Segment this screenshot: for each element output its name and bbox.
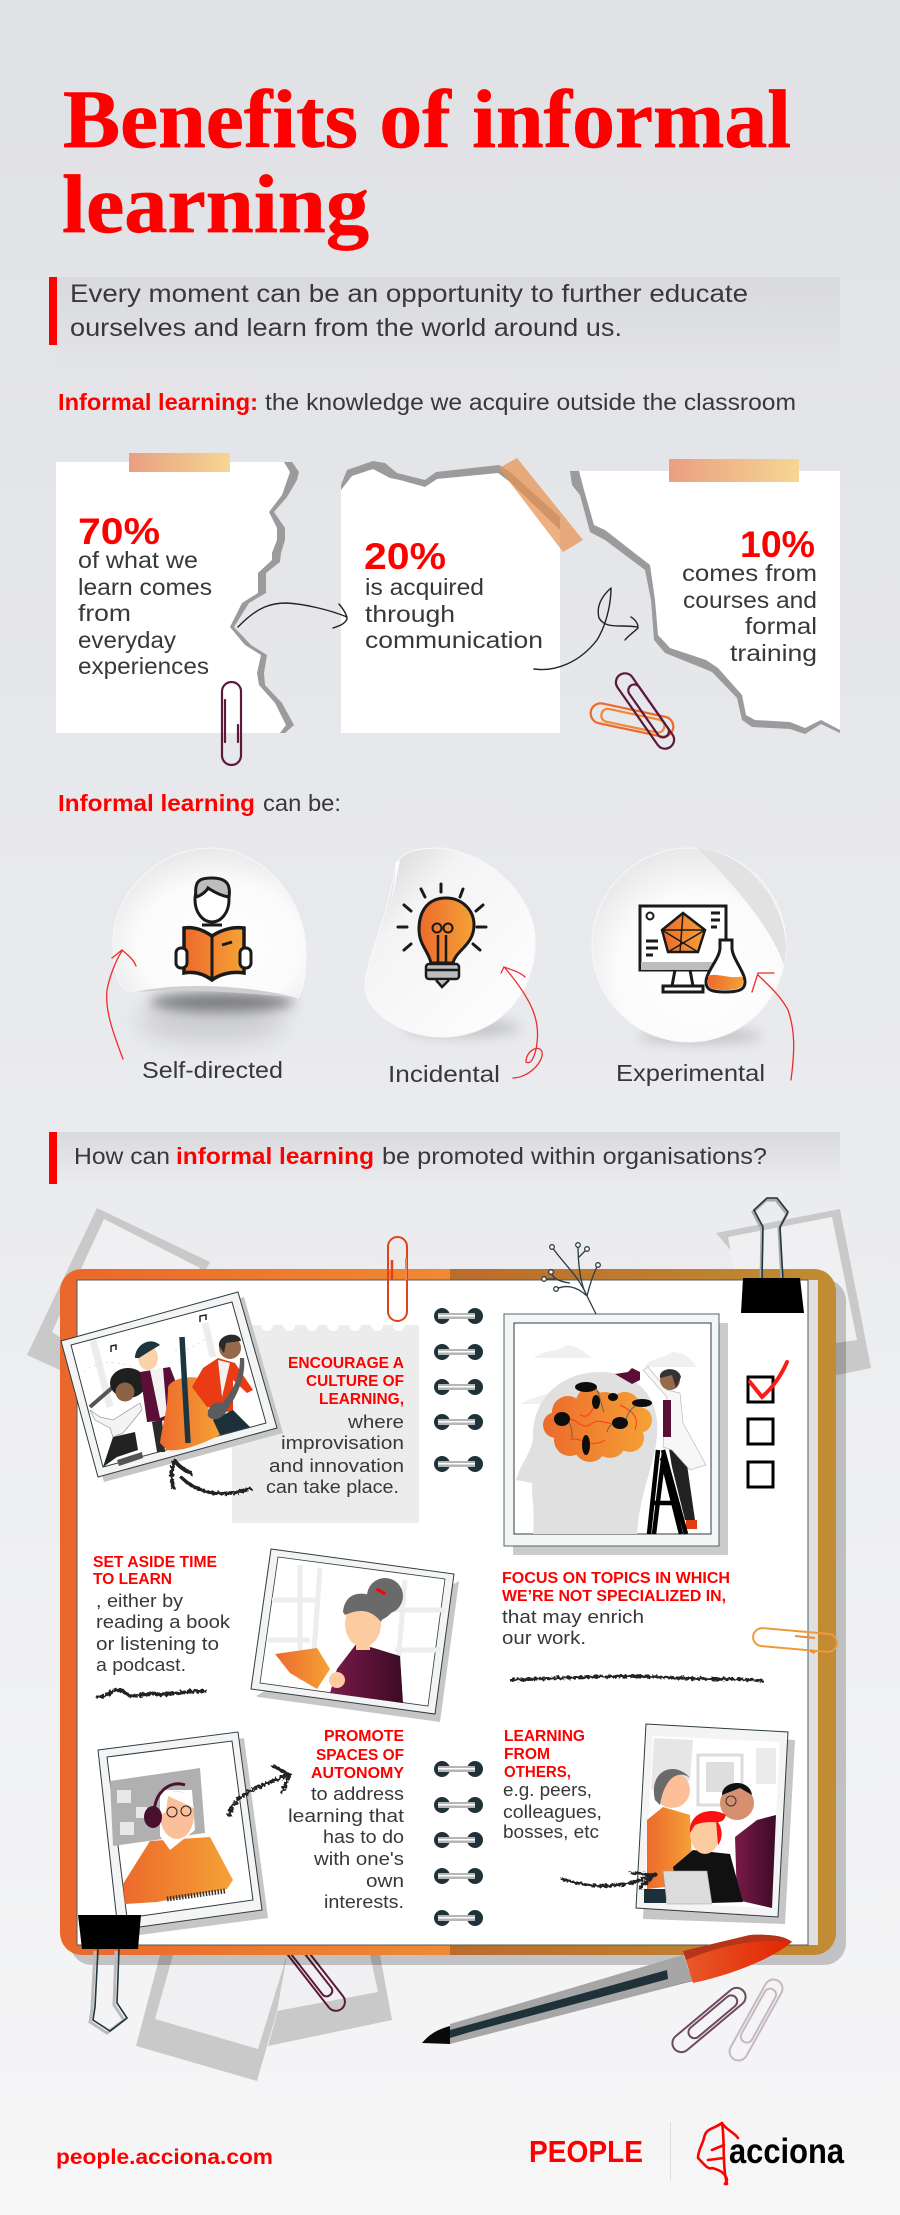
icon: grey note with punched holes: [232, 1319, 419, 1523]
text block: promote spaces of autonomy: to address: [311, 1784, 404, 1804]
sticker labels: Incidental: [388, 1061, 500, 1087]
text block: promote spaces of autonomy: interests.: [324, 1892, 404, 1912]
text block: encourage a culture of learning: LEARNING,: [319, 1391, 404, 1408]
footer url: people.acciona.com: [56, 2146, 273, 2169]
panel: 10 percent torn card: training: [730, 640, 817, 666]
panel: 20 percent torn card: [341, 458, 583, 733]
photo: brain and scientist: [504, 1314, 728, 1555]
text block: encourage a culture of learning: and innovation: [269, 1456, 404, 1476]
arrow: scribble to musicians: [172, 1461, 250, 1494]
title: [62, 73, 791, 250]
panel: 70 percent torn card: 70%: [78, 511, 160, 552]
sticker labels: Self-directed: [142, 1057, 283, 1083]
panel: 20 percent torn card: communication: [365, 627, 543, 653]
panel: 70 percent torn card: everyday: [78, 627, 177, 653]
decorative back photos: [27, 1208, 871, 2081]
text block: promote spaces of autonomy: PROMOTE: [324, 1728, 404, 1745]
photo: three colleagues: [636, 1724, 795, 1924]
icon: light bulb: [398, 884, 486, 987]
text block: learning from others: OTHERS,: [504, 1764, 571, 1781]
icon: spiral rings upper: [434, 1308, 483, 1472]
intro callout: [49, 277, 840, 372]
intro callout: Every moment can be an opportunity to further educate: [70, 280, 748, 308]
icon: spiral rings lower: [434, 1761, 483, 1926]
text block: promote spaces of autonomy: SPACES OF: [316, 1747, 404, 1764]
photo: girl with headphones: [98, 1732, 268, 1937]
definition heading: the knowledge we acquire outside the classroom: [265, 389, 796, 415]
panel: self-directed sticker: [113, 848, 306, 1042]
question callout: [49, 1132, 840, 1184]
text block: focus on topics: FOCUS ON TOPICS IN WHICH: [502, 1570, 730, 1587]
definition heading: Informal learning:: [58, 389, 258, 415]
icon: orange paperclip right: [752, 1627, 838, 1653]
panel: notebook: [60, 1243, 846, 1965]
icon: person reading: [176, 878, 251, 980]
arrow: scribble to autonomy text: [229, 1766, 290, 1815]
text block: focus on topics: WE’RE NOT SPECIALIZED IN,: [502, 1588, 726, 1605]
panel: 70 percent torn card: of what we: [78, 547, 198, 573]
title: Benefits of informal: [63, 73, 791, 165]
panel: incidental sticker: [365, 848, 535, 1037]
arrow: 70 to 20: [238, 603, 347, 628]
text block: learning from others: [503, 1728, 602, 1842]
panel: 10 percent torn card: 10%: [740, 524, 815, 565]
text block: encourage a culture of learning: can take place.: [266, 1477, 399, 1497]
text block: focus on topics: that may enrich: [502, 1607, 644, 1627]
text block: learning from others: bosses, etc: [503, 1822, 599, 1842]
heading: informal learning can be: Informal learning: [58, 790, 255, 816]
text block: promote spaces of autonomy: with one's: [313, 1849, 404, 1869]
text block: set aside time to learn: TO LEARN: [93, 1571, 172, 1588]
panel: 20 percent torn card: is acquired: [365, 574, 484, 600]
text block: encourage a culture of learning: ENCOURAGE A: [288, 1355, 404, 1372]
text block: set aside time to learn: , either by: [96, 1591, 183, 1611]
intro callout: ourselves and learn from the world around us.: [70, 314, 622, 342]
logo: acciona: acciona: [729, 2132, 844, 2171]
panel: 10 percent torn card: formal: [745, 613, 817, 639]
text block: encourage a culture of learning: where: [347, 1412, 404, 1432]
panel: 10 percent torn card: [570, 459, 840, 734]
text block: learning from others: colleagues,: [503, 1802, 602, 1822]
arrow: scribble to colleagues photo: [562, 1873, 654, 1888]
icon: binder clip top right: [741, 1198, 804, 1313]
question callout: How can: [74, 1143, 170, 1169]
text block: encourage a culture of learning: CULTURE OF: [306, 1373, 404, 1390]
icon: branch above photo: [542, 1243, 600, 1314]
question callout: informal learning: [176, 1143, 374, 1169]
text block: promote spaces of autonomy: [288, 1728, 404, 1912]
footer people wordmark: PEOPLE: [529, 2134, 643, 2169]
text block: promote spaces of autonomy: has to do: [323, 1827, 404, 1847]
icon: paperclips near card three: [589, 670, 678, 752]
panel: 10 percent torn card: comes from: [682, 560, 817, 586]
heading: informal learning can be: [58, 790, 341, 816]
icon: paperclip under notebook: [282, 1936, 349, 2014]
panel: 70 percent torn card: experiences: [78, 653, 209, 679]
text block: promote spaces of autonomy: AUTONOMY: [311, 1765, 404, 1782]
text block: set aside time to learn: SET ASIDE TIME: [93, 1554, 217, 1571]
text block: learning from others: e.g. peers,: [503, 1780, 592, 1800]
text block: learning from others: FROM: [504, 1746, 550, 1763]
title: learning: [62, 158, 369, 250]
icon: orange paperclip top: [388, 1237, 407, 1321]
footer divider: [670, 2122, 671, 2180]
logo: acciona: [698, 2123, 844, 2184]
photo: musicians: [61, 1292, 283, 1482]
sticker labels: [142, 1057, 765, 1087]
text block: learning from others: LEARNING: [504, 1728, 585, 1745]
scribble divider: [510, 1676, 763, 1681]
icon: paperclip on card one: [222, 682, 241, 765]
panel: 10 percent torn card: courses and: [683, 587, 817, 613]
text block: set aside time to learn: or listening to: [96, 1634, 219, 1654]
icon: loose paperclips: [669, 1976, 786, 2064]
text block: set aside time to learn: reading a book: [96, 1612, 231, 1632]
text block: encourage a culture of learning: [266, 1355, 404, 1497]
panel: 70 percent torn card: learn comes: [78, 574, 212, 600]
text block: set aside time to learn: a podcast.: [96, 1655, 186, 1675]
text block: promote spaces of autonomy: own: [366, 1871, 404, 1891]
question callout: be promoted within organisations?: [382, 1143, 767, 1169]
checklist: [748, 1362, 787, 1487]
panel: 70 percent torn card: from: [78, 600, 131, 626]
definition heading: [58, 389, 796, 415]
sticker labels: Experimental: [616, 1060, 765, 1086]
arrow: 20 to 10: [534, 588, 638, 670]
photo: woman reading: [251, 1549, 459, 1722]
text block: encourage a culture of learning: improvisation: [281, 1433, 404, 1453]
panel: 70 percent torn card: [56, 453, 299, 733]
panel: 20 percent torn card: through: [365, 601, 455, 627]
text block: promote spaces of autonomy: learning that: [288, 1806, 404, 1826]
icon: pen: [422, 1935, 792, 2044]
scribble under text: [96, 1690, 207, 1697]
panel: experimental sticker: [592, 848, 786, 1044]
text block: set aside time to learn: [93, 1554, 231, 1675]
icon: monitor and flask: [640, 906, 745, 992]
arrows: red hand-drawn: [107, 950, 794, 1080]
text block: focus on topics: our work.: [502, 1628, 586, 1648]
heading: informal learning can be: can be:: [263, 790, 341, 816]
text block: focus on topics: [502, 1570, 730, 1648]
panel: 20 percent torn card: 20%: [364, 536, 446, 577]
icon: binder clip bottom left: [78, 1915, 141, 2033]
